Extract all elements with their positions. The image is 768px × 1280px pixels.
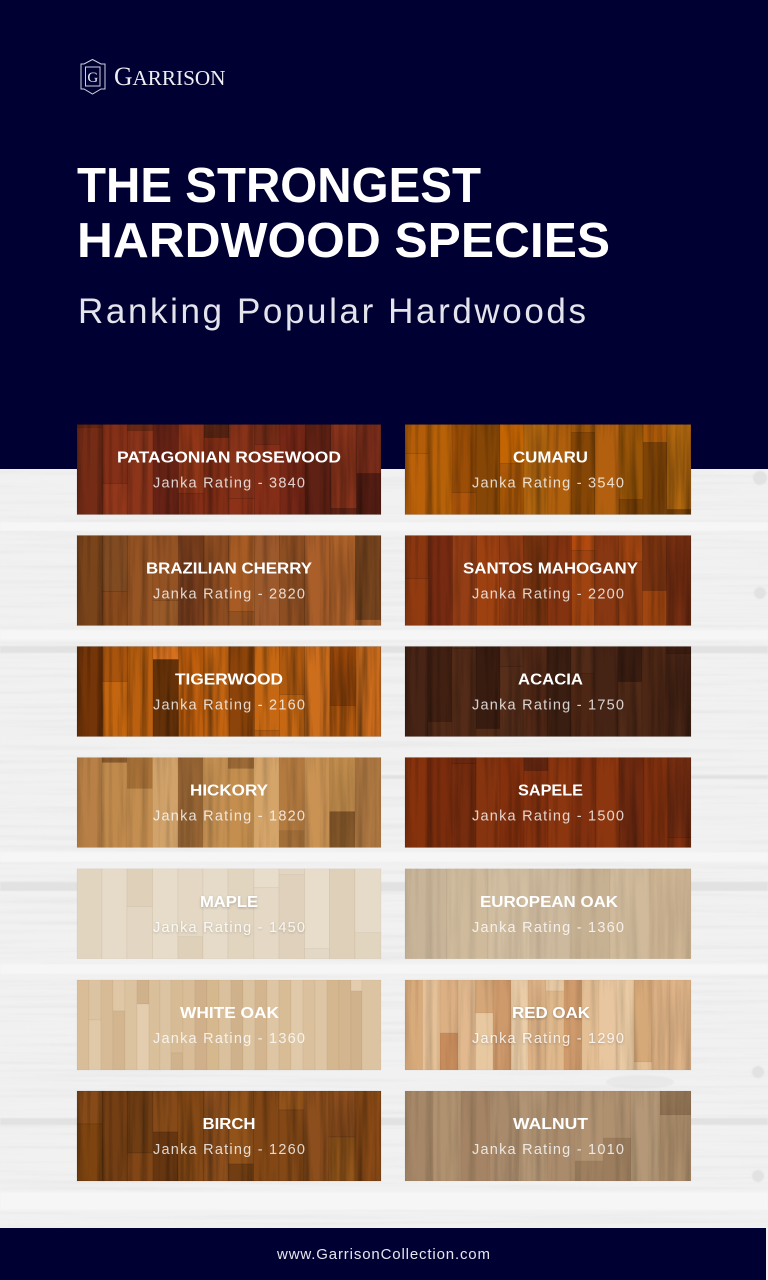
card: Cumaru bbox=[405, 424, 691, 514]
rating: Janka Rating - 3540 bbox=[472, 476, 624, 492]
wood texture bbox=[405, 1091, 691, 1181]
footer band bbox=[0, 1228, 766, 1280]
species name: EUROPEAN OAK bbox=[480, 894, 619, 911]
wood texture bbox=[77, 646, 381, 736]
wood texture bbox=[405, 646, 691, 736]
header band bbox=[0, 0, 768, 469]
species name: RED OAK bbox=[512, 1005, 591, 1022]
rating: Janka Rating - 1450 bbox=[153, 920, 305, 936]
rating: Janka Rating - 2200 bbox=[472, 586, 624, 602]
wood texture bbox=[405, 536, 691, 626]
wood texture bbox=[77, 1091, 381, 1181]
rating: Janka Rating - 1750 bbox=[472, 698, 624, 714]
card: Brazilian Cherry bbox=[77, 536, 381, 626]
rating: Janka Rating - 1360 bbox=[153, 1031, 305, 1047]
species name: CUMARU bbox=[513, 450, 588, 466]
rating: Janka Rating - 2160 bbox=[153, 698, 305, 714]
species name: WHITE OAK bbox=[180, 1005, 280, 1022]
species name: SAPELE bbox=[518, 782, 583, 800]
card: European Oak bbox=[405, 869, 691, 959]
species name: WALNUT bbox=[513, 1116, 589, 1133]
species name: BRAZILIAN CHERRY bbox=[146, 560, 313, 578]
title: HARDWOOD SPECIES bbox=[77, 214, 610, 268]
logo: Garrison bbox=[81, 60, 226, 94]
wood texture bbox=[405, 758, 691, 848]
wood texture bbox=[77, 869, 381, 959]
wood texture bbox=[77, 980, 381, 1070]
background: white wood bbox=[0, 469, 768, 1229]
card: Tigerwood bbox=[77, 646, 381, 736]
card: White Oak bbox=[77, 980, 381, 1070]
wood texture bbox=[77, 758, 381, 848]
icon: G emblem bbox=[81, 60, 105, 94]
wood texture bbox=[77, 536, 381, 626]
card: Sapele bbox=[405, 758, 691, 848]
species name: HICKORY bbox=[190, 782, 269, 800]
species name: BIRCH bbox=[202, 1116, 256, 1133]
rating: Janka Rating - 1820 bbox=[153, 808, 305, 824]
title: THE STRONGEST bbox=[77, 159, 481, 213]
wood texture bbox=[405, 980, 691, 1070]
species name: PATAGONIAN ROSEWOOD bbox=[117, 450, 341, 466]
rating: Janka Rating - 1360 bbox=[472, 920, 624, 936]
card: Maple bbox=[77, 869, 381, 959]
icon: G emblem: G bbox=[87, 70, 98, 86]
wood texture bbox=[77, 424, 381, 514]
species name: TIGERWOOD bbox=[175, 672, 283, 688]
card: Acacia bbox=[405, 646, 691, 736]
footer website: www.GarrisonCollection.com bbox=[276, 1246, 490, 1263]
rating: Janka Rating - 1290 bbox=[472, 1031, 624, 1047]
rating: Janka Rating - 2820 bbox=[153, 586, 305, 602]
card: Santos Mahogany bbox=[405, 536, 691, 626]
rating: Janka Rating - 3840 bbox=[153, 476, 305, 492]
rating: Janka Rating - 1010 bbox=[472, 1142, 624, 1158]
species name: SANTOS MAHOGANY bbox=[463, 560, 639, 578]
species name: ACACIA bbox=[518, 672, 583, 688]
wood texture bbox=[405, 869, 691, 959]
card: Birch bbox=[77, 1091, 381, 1181]
card: Hickory bbox=[77, 758, 381, 848]
card: Walnut bbox=[405, 1091, 691, 1181]
wood texture bbox=[405, 424, 691, 514]
rating: Janka Rating - 1500 bbox=[472, 808, 624, 824]
title bbox=[77, 159, 610, 268]
species name: MAPLE bbox=[200, 894, 258, 911]
card: Patagonian Rosewood bbox=[77, 424, 381, 514]
rating: Janka Rating - 1260 bbox=[153, 1142, 305, 1158]
card: Red Oak bbox=[405, 980, 691, 1070]
subtitle: Ranking Popular Hardwoods bbox=[78, 292, 586, 331]
wordmark: GARRISON bbox=[114, 62, 226, 91]
